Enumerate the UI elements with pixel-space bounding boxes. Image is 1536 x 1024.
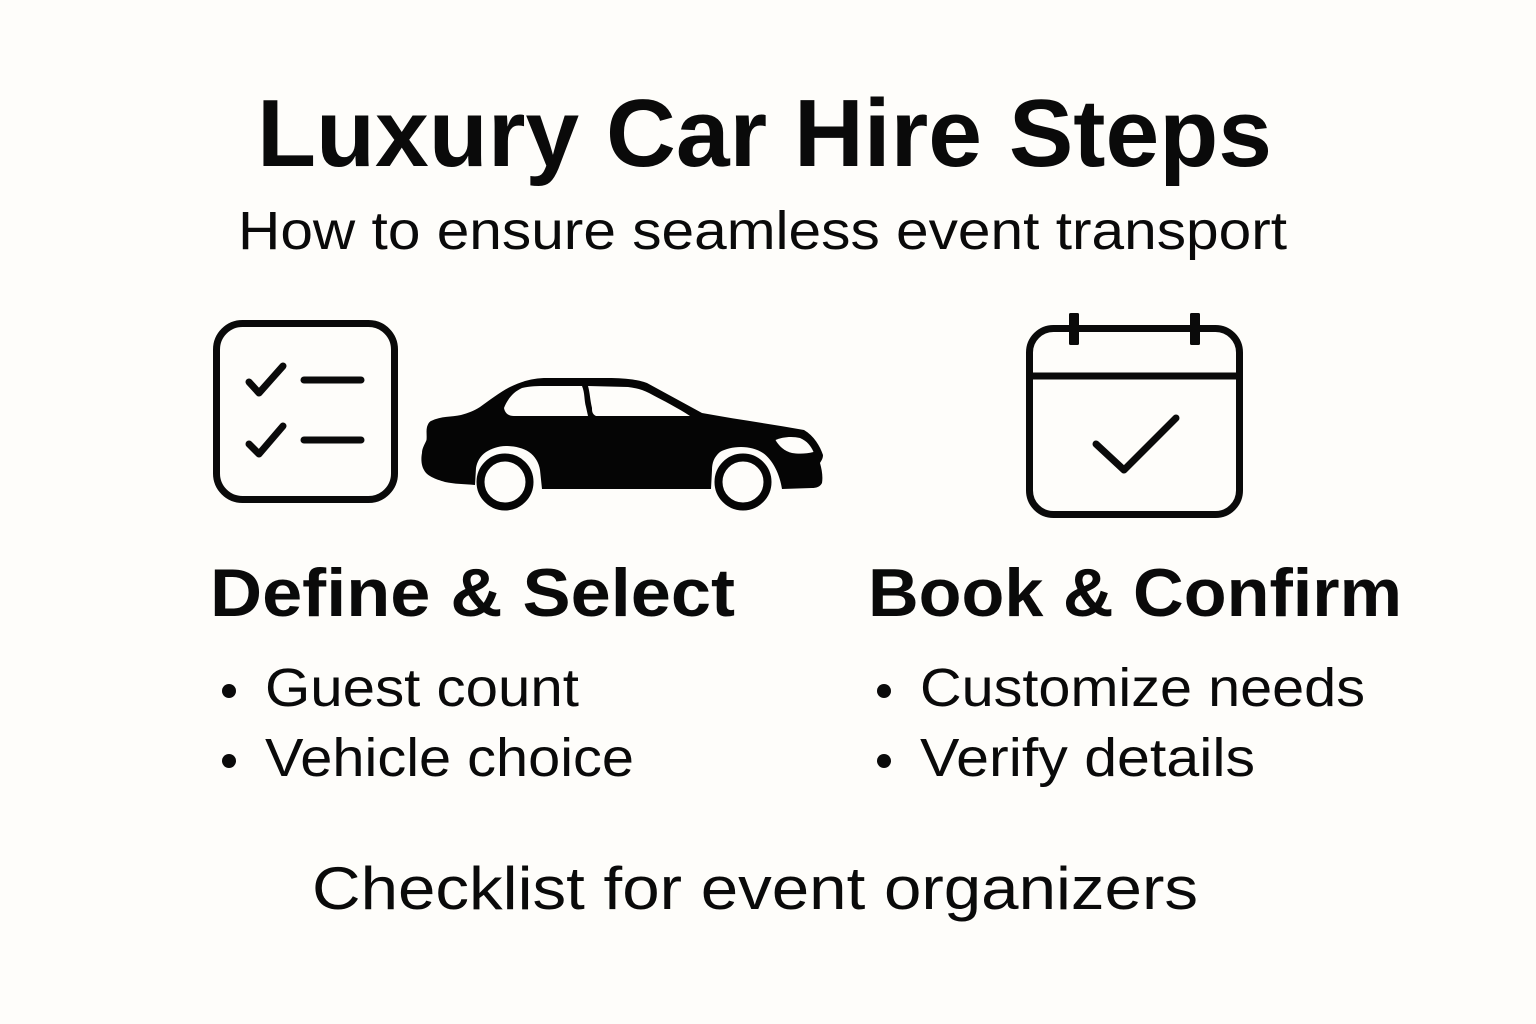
icon: car (421, 378, 823, 506)
icon: checklist (216, 324, 394, 500)
title: Luxury Car Hire Steps (257, 80, 1272, 187)
list: book and confirm: Customize needs (920, 658, 1365, 718)
list: book and confirm (877, 658, 1365, 788)
rear window (504, 386, 588, 416)
list: define and select: Vehicle choice (265, 728, 634, 788)
list: define and select (222, 658, 634, 788)
heading: define and select: Define & Select (210, 555, 735, 631)
heading: book and confirm: Book & Confirm (868, 555, 1402, 631)
headlight (776, 437, 814, 454)
front window (588, 386, 690, 416)
list: book and confirm: Verify details (920, 728, 1255, 788)
rear wheel (480, 458, 530, 506)
icon: calendar (1030, 313, 1240, 514)
footer caption: Checklist for event organizers (312, 855, 1198, 922)
subtitle: How to ensure seamless event transport (238, 201, 1287, 261)
front wheel (718, 458, 768, 506)
list: define and select: Guest count (265, 658, 579, 718)
car body (421, 378, 823, 489)
